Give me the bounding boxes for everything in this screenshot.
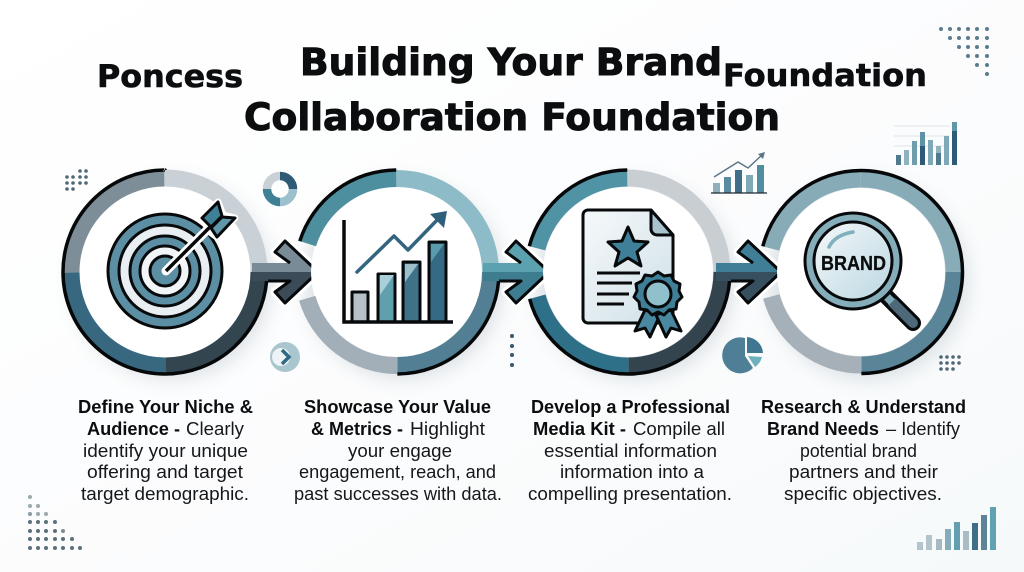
text block: step 3: Compile all <box>633 418 725 439</box>
text block: step 1: identify your unique <box>83 440 248 461</box>
ring shadows <box>72 180 968 380</box>
text block: step 1: Clearly <box>186 418 245 439</box>
ring 2 <box>295 170 499 374</box>
panel: step 3 media kit <box>526 170 730 374</box>
text block: step 1: Define Your Niche & <box>78 397 253 417</box>
arrow 3 <box>716 241 781 303</box>
dots: lower right cluster <box>939 355 961 371</box>
panel: step 4 brand research <box>760 170 962 374</box>
arrow 1 <box>252 241 318 303</box>
title: Building Your Brand <box>300 41 722 84</box>
icon: circular arrow badge <box>270 342 300 372</box>
icon: magnifying glass <box>805 213 913 323</box>
text block: step 4: Research & Understand <box>761 397 966 417</box>
mini chart: top right <box>894 122 957 165</box>
text block: step 2: Highlight <box>410 418 485 439</box>
text block: step 3 <box>528 397 732 504</box>
ring 1 <box>63 170 267 374</box>
mini chart: bottom right <box>917 507 996 550</box>
text block: step 4: partners and their <box>789 461 938 482</box>
text block: step 2: engagement, reach, and <box>299 461 496 482</box>
text block: step 4: – Identify <box>886 418 961 439</box>
icon: donut <box>267 176 293 202</box>
text block: step 4 <box>761 397 966 504</box>
dots: top right triangle <box>939 27 989 76</box>
icon: bar chart with trend arrow <box>344 211 453 322</box>
label: BRAND: BRAND <box>821 253 886 275</box>
ring 3 <box>526 170 730 374</box>
arrow 2 <box>483 241 549 303</box>
text block: step 2: past successes with data. <box>294 483 502 504</box>
icon: pie chart <box>722 337 763 373</box>
text block: step 4: potential brand <box>800 440 917 461</box>
text block: step 1: Audience - <box>87 419 180 439</box>
dots: upper left cluster <box>65 169 88 191</box>
text block: step 3: information into a <box>560 461 705 482</box>
dots: vertical <box>510 334 514 367</box>
text block: step 2: & Metrics - <box>311 419 403 439</box>
icon: target with arrow <box>108 202 235 328</box>
ring 4 <box>760 170 962 374</box>
mini chart: top centre-right <box>711 152 767 193</box>
text block: step 3: Media Kit - <box>533 419 626 439</box>
text block: step 1: offering and target <box>87 461 243 482</box>
text block: step 1 <box>78 397 253 504</box>
icon: document with star and rosette <box>583 210 682 337</box>
title <box>244 41 780 139</box>
text block: step 1: target demographic. <box>81 483 249 504</box>
side heading: Poncess: Poncess <box>97 59 243 95</box>
side heading: Foundation: Foundation <box>723 58 927 94</box>
text block: step 2: your engage <box>348 440 452 461</box>
title: Collaboration Foundation <box>244 96 780 139</box>
text block: step 3: Develop a Professional <box>531 397 730 417</box>
text block: step 2 <box>294 397 502 504</box>
text block: step 2: Showcase Your Value <box>304 397 491 417</box>
text block: step 3: essential information <box>544 440 717 461</box>
text block: step 4: specific objectives. <box>784 483 942 504</box>
text block: step 4: Brand Needs <box>767 419 879 439</box>
panel: step 2 chart <box>295 170 499 374</box>
text block: step 3: compelling presentation. <box>528 483 732 504</box>
dots: bottom left triangle <box>28 495 82 550</box>
panel: step 1 target <box>63 170 267 374</box>
